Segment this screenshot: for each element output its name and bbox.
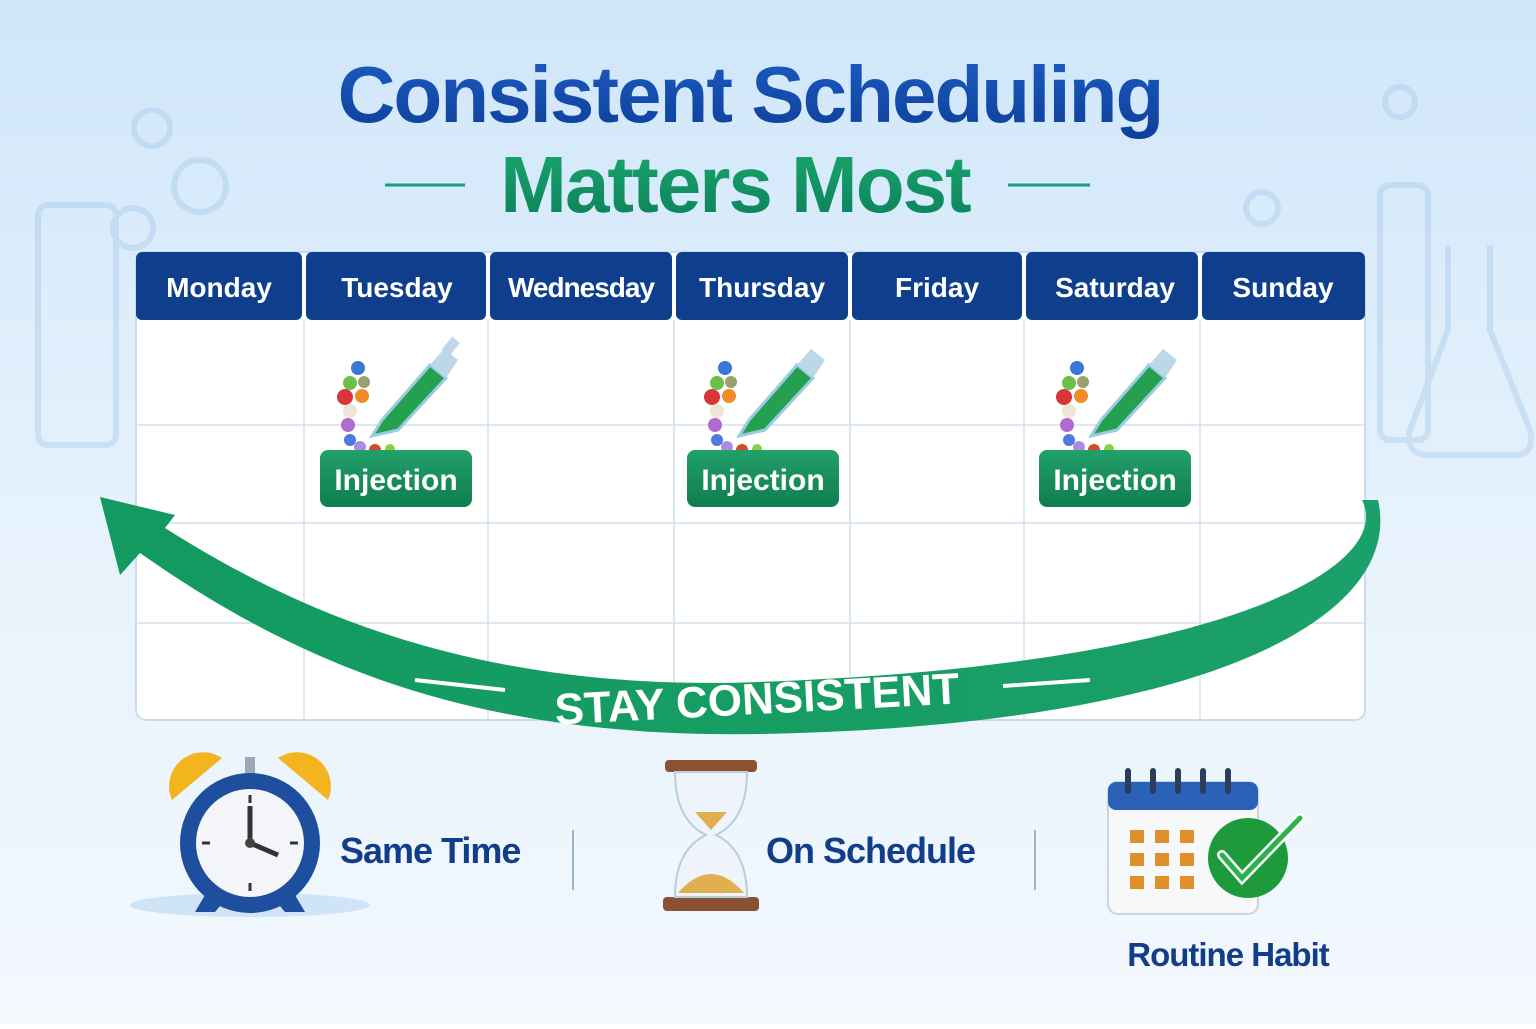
icon: injection saturday: Injection xyxy=(1053,464,1177,497)
icon: injection thursday xyxy=(687,349,839,507)
label: same time: Same Time xyxy=(340,830,520,871)
day headers: Wednesday xyxy=(508,272,655,303)
icon: pills and syringe: Injection xyxy=(334,464,458,497)
title: Consistent Scheduling xyxy=(338,50,1162,139)
icon: injection thursday: Injection xyxy=(701,464,825,497)
day headers xyxy=(136,252,1365,320)
title: Matters Most xyxy=(500,140,971,229)
arrow: stay consistent: STAY CONSISTENT xyxy=(553,664,961,735)
day headers: Tuesday xyxy=(341,272,453,303)
decorative lab glassware xyxy=(38,87,1531,455)
title xyxy=(338,50,1162,229)
injection markers xyxy=(320,337,472,507)
day headers: Monday xyxy=(166,272,272,303)
day headers: Thursday xyxy=(699,272,825,303)
label: on schedule: On Schedule xyxy=(766,830,975,871)
day headers: Saturday xyxy=(1055,272,1175,303)
label: routine habit: Routine Habit xyxy=(1127,936,1330,973)
icon: hourglass xyxy=(663,760,759,911)
icon: alarm clock xyxy=(130,752,370,917)
arrow: stay consistent xyxy=(100,497,1380,735)
icon: injection saturday xyxy=(1039,349,1191,507)
icon: pills and syringe xyxy=(320,337,472,507)
day headers: Sunday xyxy=(1232,272,1334,303)
panel: weekly calendar xyxy=(136,252,1365,720)
day headers: Friday xyxy=(895,272,979,303)
icon: calendar with check xyxy=(1108,768,1300,914)
